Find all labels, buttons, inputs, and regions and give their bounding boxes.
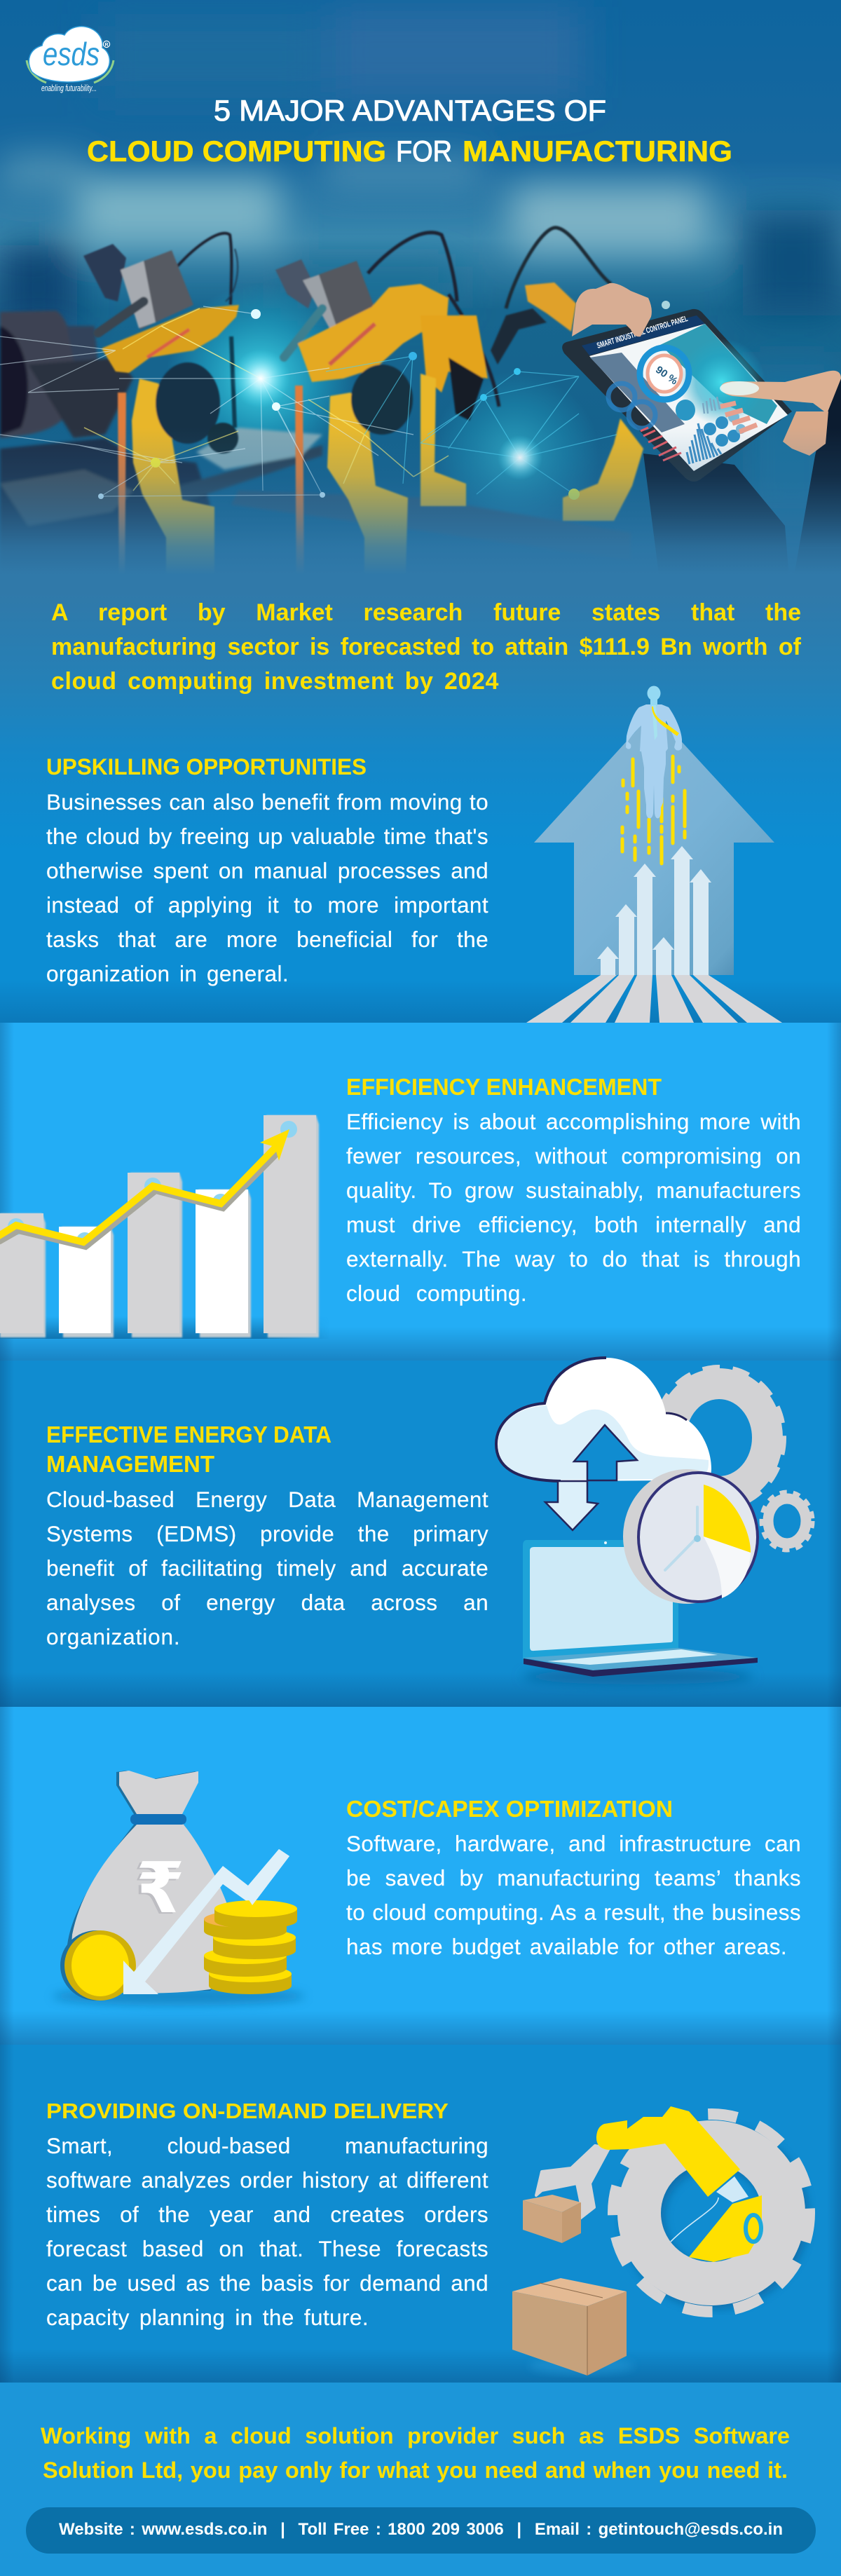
logo: R [105,43,109,48]
closing statement [41,2423,790,2483]
text: efficiency body: externally. The way to do that is through [346,1246,801,1272]
small box [523,2195,581,2243]
text: upskilling body: Businesses can also benefit from moving to [46,789,488,815]
text: energy data body: benefit of facilitating timely and accurate [46,1555,488,1581]
title: 5 MAJOR ADVANTAGES OF [214,94,606,127]
hand holding tablet [572,283,652,336]
clock [623,1469,758,1604]
robot arm three [491,228,643,521]
text: efficiency body: cloud computing. [346,1281,527,1306]
wire [671,2197,718,2242]
arrow tip over coins [242,1849,289,1905]
text: cost body: be saved by manufacturing teams’ thanks [346,1865,801,1890]
text: energy data body: Cloud-based Energy Data Management [46,1487,488,1512]
logo: enabling futurability... [41,83,97,93]
text: upskilling body: tasks that are more beneficial for the [46,927,488,952]
small up arrows [597,846,711,975]
data points [8,1121,297,1249]
big arrow [534,711,774,975]
lower yellow joint [689,2195,762,2262]
text: cost body [346,1831,801,1959]
icon: robot arm gear and boxes [512,2106,815,2376]
text: efficiency body [346,1109,801,1306]
panel: intro and upskilling background [0,592,841,1023]
text: efficiency body: Efficiency is about accomplishing more with [346,1109,801,1134]
text: delivery body: forecast based on that. These forecasts [46,2236,488,2261]
text: efficiency body: must drive efficiency, both internally and [346,1212,801,1237]
heading: upskilling: UPSKILLING OPPORTUNITIES [46,754,367,779]
text: upskilling body: instead of applying it to more important [46,892,488,918]
claw [536,2146,609,2228]
bar chart: rising arrow [0,1115,320,1339]
icon: money bag with coins [53,1771,304,2010]
text: cost body: has more budget available for other areas. [346,1934,787,1959]
floor shadow [0,1319,320,1339]
tablet title: SMART INDUSTRIAL CONTROL PANEL [596,315,689,350]
title [87,94,732,168]
blurred factory background [0,7,841,526]
intro statement [51,599,802,695]
text: delivery body: capacity planning in the future. [46,2305,369,2330]
tablet donut gauge [640,348,689,400]
intro statement: A report by Market research future states that the [51,599,801,626]
machinery at left [0,311,631,596]
big coin [60,1930,136,2001]
heading: delivery: PROVIDING ON-DEMAND DELIVERY [46,2099,449,2123]
panel: cost background [0,1707,841,2045]
text: cost body: Software, hardware, and infrastructure can [346,1831,801,1856]
panel: efficiency background [0,1023,841,1361]
text: upskilling body: organization in general. [46,961,289,986]
text: delivery body: software analyzes order history at different [46,2167,488,2193]
text: delivery body [46,2133,488,2330]
text: energy data body: analyses of energy data across an [46,1590,488,1615]
text: upskilling body: otherwise spent on manual processes and [46,858,488,883]
intro statement: manufacturing sector is forecasted to attain $111.9 Bn worth of [51,634,801,660]
cloud [496,1358,711,1481]
title: CLOUD COMPUTING [87,135,386,168]
icon: flying businessman over arrows [526,686,782,1023]
intro statement: cloud computing investment by 2024 [51,668,499,695]
tablet: 90 % [653,364,680,388]
pointing hand [721,371,841,414]
tablet [562,309,792,482]
heading: energy data: EFFECTIVE ENERGY DATA [46,1422,331,1447]
heading: cost: COST/CAPEX OPTIMIZATION [346,1796,673,1822]
closing statement: Working with a cloud solution provider such as ESDS Software [41,2423,790,2448]
teal glow behind network [166,284,355,473]
text: cost body: to cloud computing. As a result, the business [346,1900,801,1925]
laptop [522,1540,758,1684]
panel: hero photo background [0,0,841,592]
bottom fade [0,428,841,596]
businessman [626,686,682,819]
panel: delivery background [0,2045,841,2383]
text: delivery body: can be used as the basis for demand and [46,2270,488,2296]
big gear [656,1369,782,1506]
panel: footer background [0,2383,841,2576]
title: FOR [396,135,452,168]
closing statement: Solution Ltd, you pay only for what you need and when you need it. [43,2458,788,2483]
forearm [716,2176,748,2202]
tablet wearer body [643,454,791,596]
contact bar [26,2507,816,2554]
text: upskilling body [46,789,488,986]
zigzag arrow [123,1849,289,1994]
text: energy data body [46,1487,488,1649]
yellow dashes [622,756,685,864]
trend arrow [0,1129,289,1246]
text: energy data body: organization. [46,1624,180,1649]
text: delivery body: times of the year and creates orders [46,2202,488,2227]
icon: money bag with coins: ₹ [136,1847,185,1929]
small gear [762,1492,812,1550]
sync arrows [545,1425,637,1530]
rupee symbol: ₹ [133,1848,182,1930]
heading: energy data: MANAGEMENT [46,1451,214,1477]
robot arm one [83,233,239,596]
bars [0,1115,319,1337]
contact text: Website : www.esds.co.in | Toll Free : 1800 209 3006 | Email : getintouch@esds.co.in [59,2520,783,2539]
text: upskilling body: the cloud by freeing up valuable time that's [46,824,488,849]
text: efficiency body: quality. To grow sustainably, manufacturers [346,1178,801,1203]
logo [25,25,115,93]
bag [67,1771,245,1994]
floor shadow [53,1987,305,2005]
road stripes [526,975,782,1023]
big box [512,2278,634,2376]
heading: efficiency: EFFICIENCY ENHANCEMENT [346,1074,662,1100]
gear [613,2114,809,2312]
robot arm two [275,233,499,596]
network nodes [98,301,670,500]
network lines [0,306,413,496]
text: energy data body: Systems (EDMS) provide the primary [46,1521,488,1546]
logo: esds [43,36,100,72]
text: efficiency body: fewer resources, without compromising on [346,1143,801,1168]
heading: energy data [46,1422,331,1477]
panel: energy data background [0,1361,841,1707]
coin stack [204,1900,297,1994]
yellow arm [596,2106,740,2197]
title: MANUFACTURING [463,135,732,168]
icon: cloud, clock, gears and laptop [495,1356,814,1687]
text: delivery body: Smart, cloud-based manufacturing [46,2133,488,2158]
